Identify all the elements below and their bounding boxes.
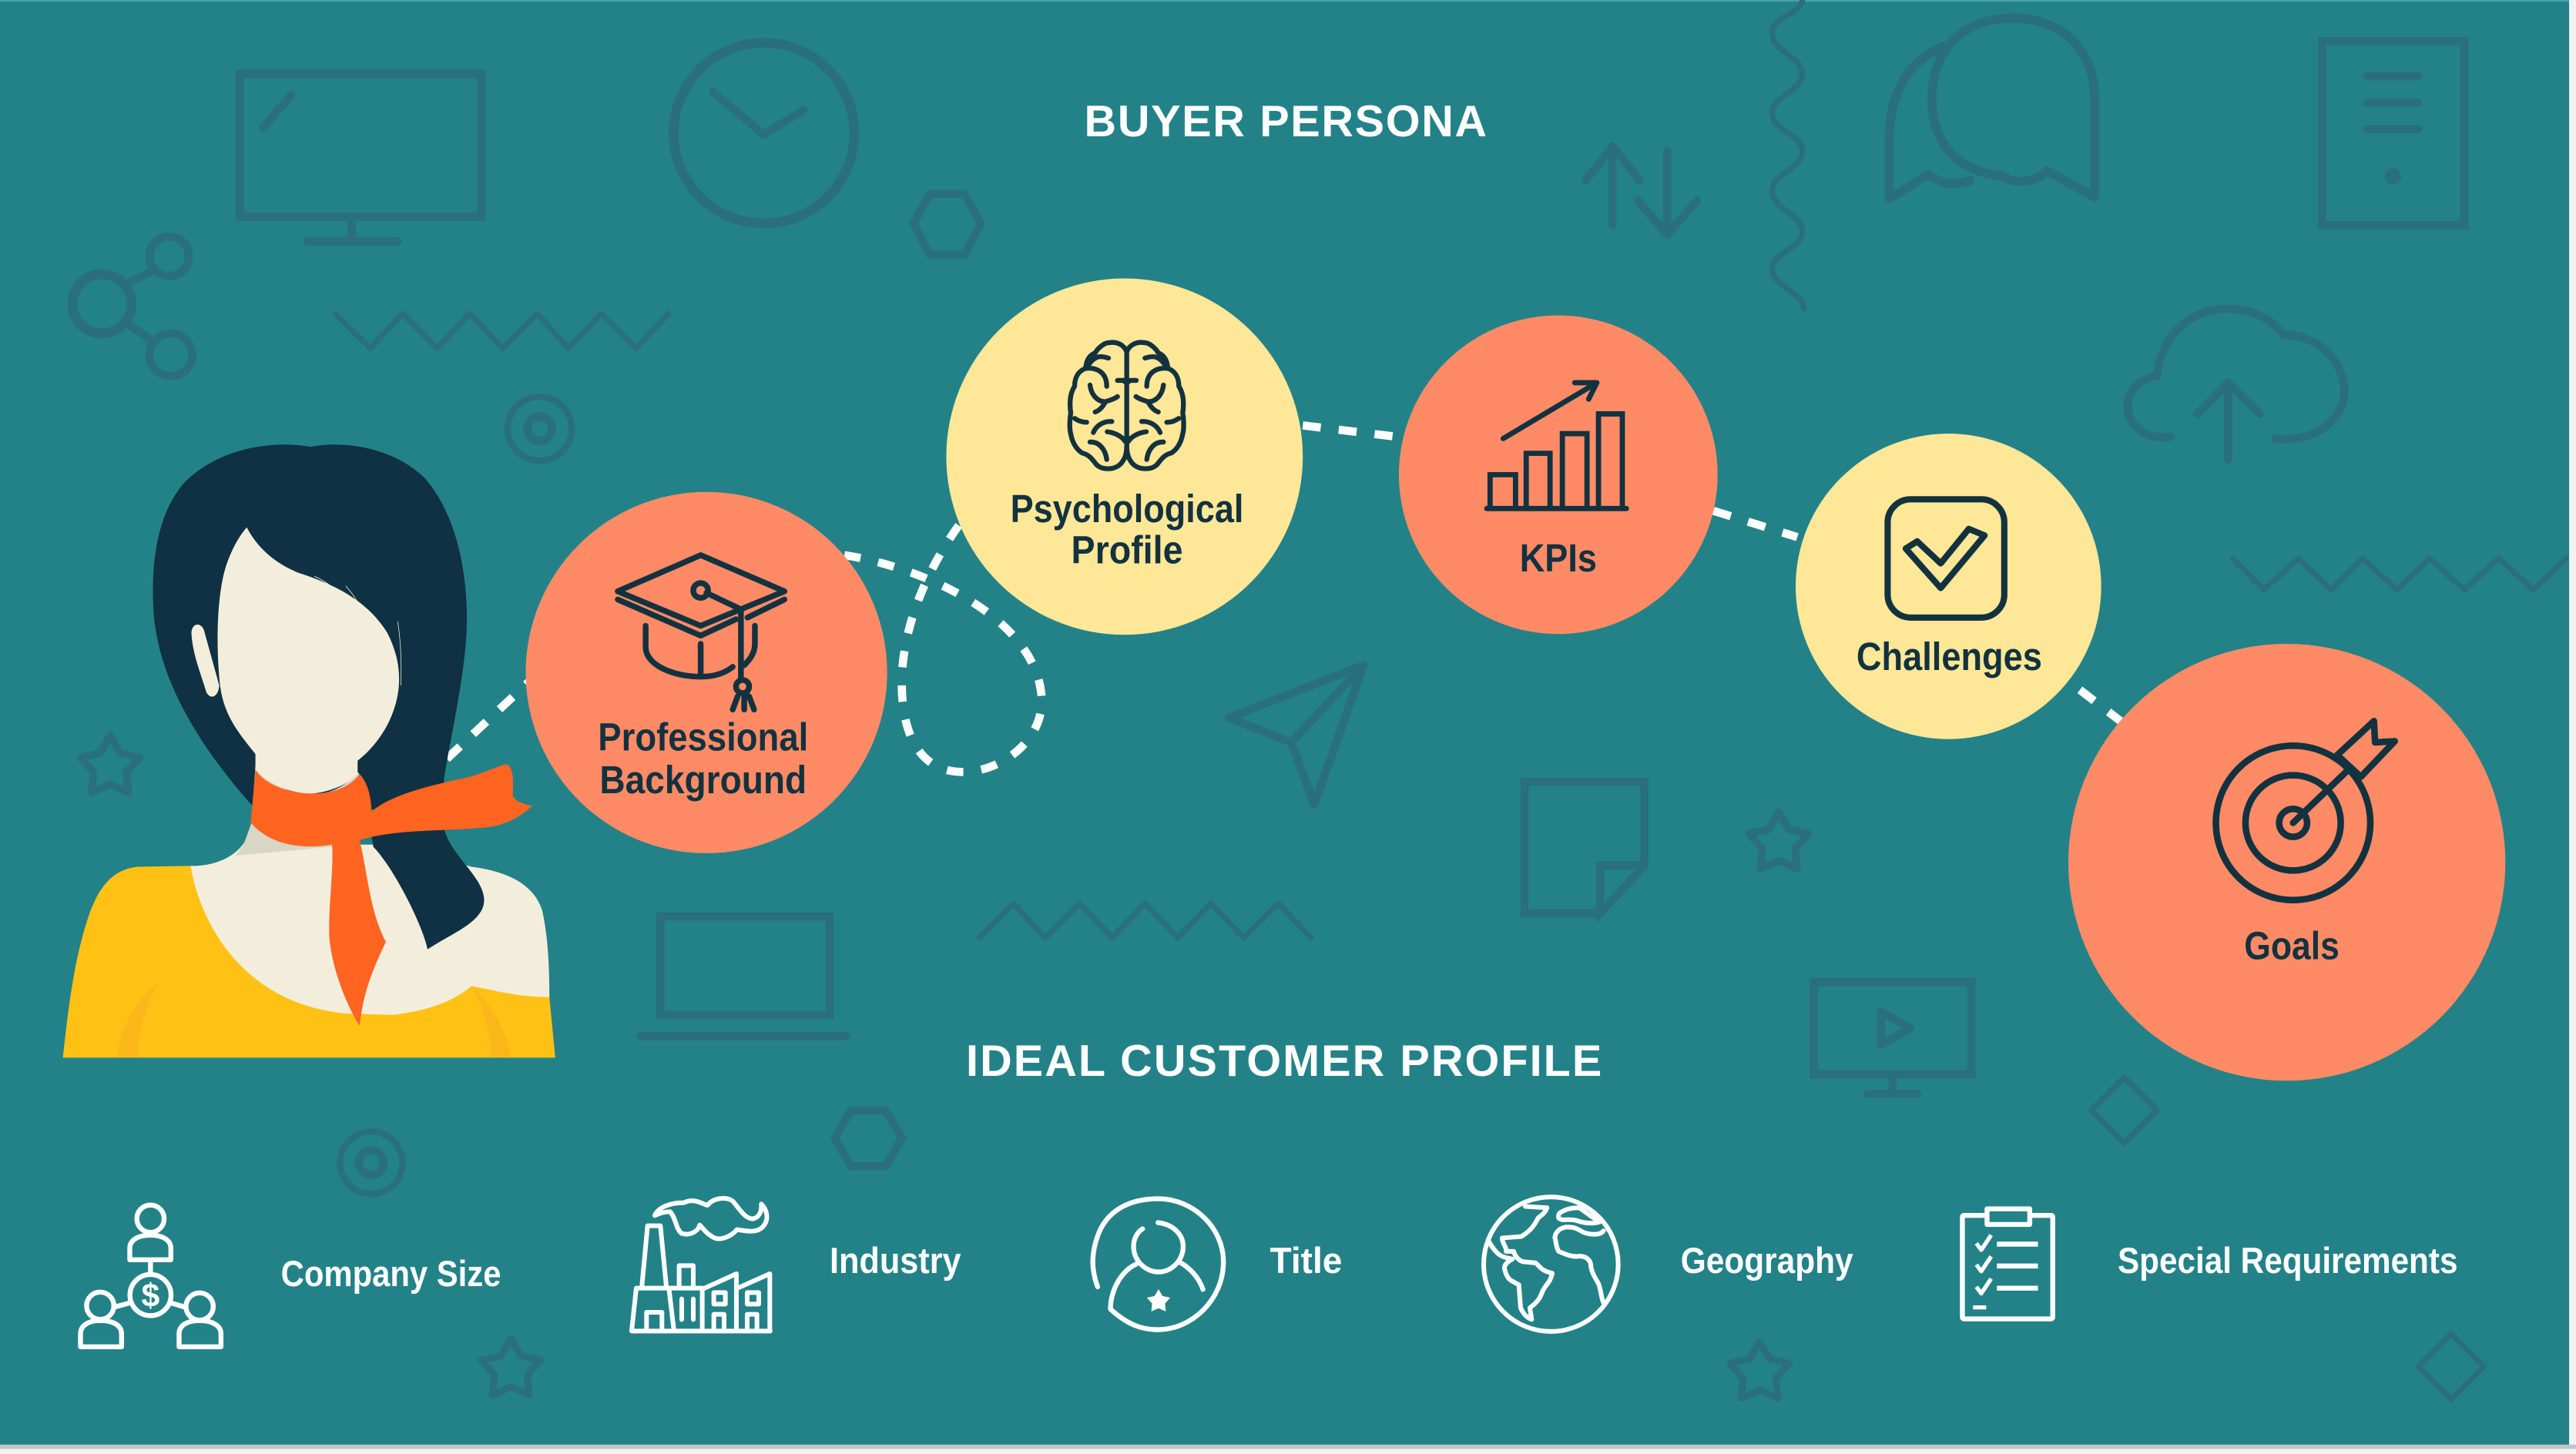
connector: persona to professional (447, 682, 529, 759)
icon: person badge (1093, 1199, 1223, 1330)
top fold left (118, 984, 157, 1057)
icon: globe (1484, 1197, 1618, 1332)
circle fill (525, 492, 887, 853)
circle: challenges (1796, 434, 2101, 739)
orange scarf (250, 764, 532, 1026)
icon: checkbox (1887, 499, 2004, 618)
hair (153, 444, 467, 827)
circle: KPIs (1399, 315, 1718, 634)
dashed connector path (447, 425, 2122, 772)
icon: hexagon bottom (834, 1111, 902, 1166)
item: special requirements (1962, 1209, 2457, 1319)
circle fill (1399, 315, 1718, 634)
icon: sticky note (1524, 782, 1645, 913)
face (217, 528, 399, 794)
squiggle line (1772, 0, 1804, 309)
label: Industry: Industry (830, 1241, 961, 1281)
zigzag right (2232, 558, 2566, 590)
icon: diamond bottom right (2418, 1334, 2484, 1399)
icon: star bottom center (1730, 1342, 1789, 1399)
icon: monitor (240, 74, 481, 242)
icon: share (72, 236, 193, 376)
label: Geography: Geography (1681, 1241, 1853, 1281)
icon: rising bar chart (1487, 383, 1626, 508)
icon: brain (1070, 343, 1184, 469)
connector: professional to psychological loop (844, 522, 1041, 772)
circle: goals (2068, 644, 2505, 1080)
item: geography (1484, 1197, 1853, 1332)
label: Company Size: Company Size (281, 1254, 501, 1294)
icon: paper plane (1229, 665, 1363, 805)
circle fill (1796, 434, 2101, 739)
icon: company size network (80, 1205, 221, 1347)
zigzag left (335, 313, 669, 348)
connector: psychological to KPIs (1303, 425, 1398, 437)
label: Psychological Profile: Profile (1071, 528, 1183, 572)
connector: KPIs to challenges (1713, 511, 1797, 537)
icon: diamond middle (2091, 1077, 2157, 1143)
label: Goals: Goals (2244, 923, 2340, 967)
yellow top (63, 866, 555, 1057)
label: Professional Background: Background (599, 758, 807, 802)
icon: cloud upload (2128, 309, 2344, 460)
label: Psychological Profile: Psychological (1011, 487, 1243, 531)
hair strand over shoulder (370, 822, 484, 950)
icon: chat bubbles (1890, 18, 2095, 199)
icon: star right (1749, 812, 1809, 869)
item: title (1093, 1199, 1342, 1330)
icon: factory (632, 1198, 770, 1331)
icon: dollar sign: $ (141, 1278, 159, 1315)
zigzag center (979, 903, 1311, 938)
top highlight edge (0, 0, 2569, 2)
icon: target with arrow (2216, 721, 2395, 900)
top fold right (471, 986, 511, 1057)
icon: video monitor (1813, 982, 1971, 1094)
icon: laptop (641, 916, 846, 1037)
icon: bullseye upper (508, 397, 572, 461)
label: Title: Title (1270, 1241, 1342, 1281)
circle fill (946, 279, 1303, 635)
icon: clock (673, 42, 854, 223)
title: Ideal Customer Profile: IDEAL CUSTOMER PROFILE (966, 1037, 1602, 1086)
icon: star badge (1147, 1289, 1170, 1312)
circle fill (2068, 644, 2505, 1080)
ear (191, 625, 220, 697)
icon: star bottom left (481, 1338, 541, 1395)
skin of shoulders (173, 840, 549, 1026)
icon: hexagon top (914, 194, 981, 255)
icon: star left (80, 735, 139, 792)
item: industry (632, 1198, 961, 1331)
label: Challenges: Challenges (1857, 635, 2042, 678)
connector: challenges to goals (2080, 690, 2122, 722)
fine hair highlights (314, 576, 401, 685)
illustration: faceless woman persona (63, 444, 555, 1057)
title: Buyer Persona: BUYER PERSONA (1085, 97, 1487, 146)
icon: server tower (2323, 41, 2464, 225)
label: Special Requirements: Special Requirements (2118, 1241, 2457, 1281)
icon: bullseye lower (340, 1131, 402, 1194)
bottom shadow edge (0, 1445, 2576, 1449)
label: KPIs: KPIs (1520, 536, 1597, 580)
icon: up and down arrows (1585, 146, 1697, 235)
label: Professional Background: Professional (598, 715, 808, 759)
item: company size (80, 1205, 501, 1347)
circle: psychological profile (946, 279, 1303, 635)
icon: graduation cap (618, 555, 784, 709)
neck shadow (236, 765, 365, 856)
icon: clipboard checklist (1962, 1209, 2053, 1319)
circle: professional background (525, 492, 887, 853)
